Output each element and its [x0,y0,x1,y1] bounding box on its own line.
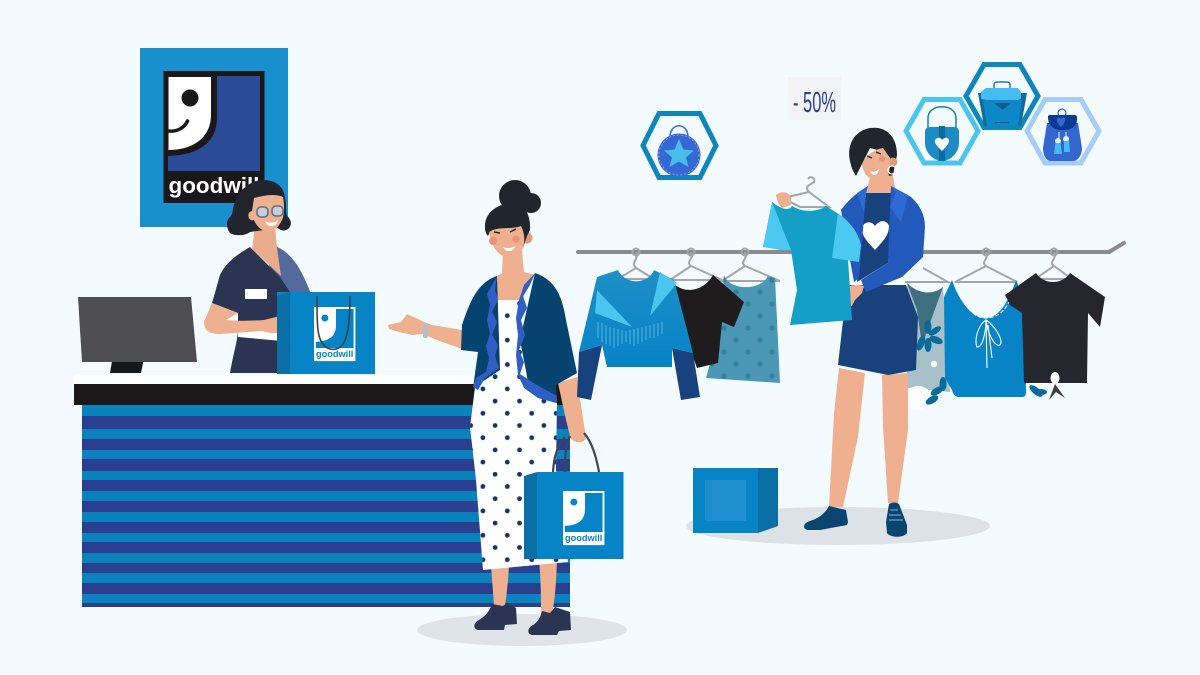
shopper ear [522,232,532,244]
gray floral top [904,283,950,410]
monitor stand [110,343,147,373]
sweater fringe [598,322,662,348]
lock bag body [925,127,959,161]
shopper right arm [558,377,586,442]
monitor screen [78,297,197,362]
name badge [245,289,267,299]
counter top [74,375,580,384]
shopper eyes [494,229,516,233]
shopper ruffle trim [473,273,557,403]
shopper [388,180,586,635]
woman legs [829,368,908,507]
sign logo [164,71,264,203]
woman ear [888,158,898,166]
hex: handbag [966,64,1038,128]
handbag flap [981,88,1021,100]
shopper bracelet [423,323,428,338]
cashier arm [204,303,295,334]
tee knot [1050,372,1060,384]
lock heart [935,138,949,151]
held hand [776,192,791,208]
flower prints [915,320,946,407]
star bag handle [670,126,688,137]
star bag body [658,134,700,176]
counter bag [277,292,375,374]
tie-neck stitching [960,293,1012,318]
sweater body [579,270,693,367]
shopper legs [491,560,557,614]
hangers [618,248,1072,282]
counter stripes [82,405,570,607]
counter [74,375,580,607]
woman face [862,148,890,182]
lock bag handle [928,107,956,128]
woman smile [870,169,879,175]
backpack tassels [1059,132,1066,140]
woman eyes [867,152,881,158]
bag body [537,472,624,559]
backpack heart [1057,118,1065,127]
shoe laces [889,510,903,520]
goodwill wall sign [140,48,288,227]
discount tag: - 50% [793,87,836,119]
woman earring [888,166,896,174]
shopper hair [485,203,530,248]
box [693,468,778,533]
cashier hair [227,180,291,235]
woman shoes [804,506,848,530]
cashier face [248,195,284,232]
blue tie-neck top [944,280,1047,399]
salesperson shadow [686,507,990,545]
fringe sweater [577,270,700,400]
star [664,139,694,167]
hex: star bag [643,114,716,178]
shirt sleeves [763,202,861,262]
backpack loop [1058,109,1066,117]
cashier glasses [257,206,283,217]
shopper bun [499,180,531,212]
woman hair [849,128,897,176]
shopper smile [503,246,515,251]
heart print [862,221,889,250]
woman with shirt [804,128,925,537]
cashier neck [252,226,281,276]
shopper shoes [474,603,517,630]
denim jacket [841,186,925,292]
held shirt [763,177,861,325]
shopper shadow [417,614,627,646]
shopping bag [524,433,624,559]
bow [976,320,1001,368]
shirt body [763,202,852,325]
woman neck [866,170,896,193]
handbag handle [994,82,1010,88]
woman skirt [838,285,918,375]
held hanger [783,177,829,207]
hex: backpack [1027,100,1099,163]
teal dotted top [706,275,780,383]
handbag back [978,93,1027,126]
cashier [204,180,311,373]
shopper face [489,226,524,258]
woman cheek [879,156,885,162]
black tee [672,275,744,368]
shopper cardigan [461,273,577,403]
bag handles [553,433,600,478]
bag logo: goodwill [565,533,602,543]
hex: lock bag [906,100,978,163]
shopper neck and chest [491,250,535,300]
woman hand [840,285,864,307]
cashier cardigan [268,246,311,300]
shopper dress [470,300,568,570]
dark tee [1005,273,1105,400]
shopper cheeks [489,237,497,245]
sweater sleeves [577,345,700,400]
sign logo: goodwill [168,173,260,198]
sweater light panels [595,272,677,327]
shopper left arm [388,314,462,349]
white hem gap [904,386,932,410]
cashier smile [265,220,278,226]
cashier belt [238,327,282,341]
jacket collar [857,186,908,222]
handbag front [983,100,1022,126]
discount tag [788,77,841,120]
counter bag handle [317,296,350,349]
monitor [78,297,197,373]
woman shirt [857,193,896,282]
backpack flap [1048,115,1077,130]
counter bag logo: goodwill [316,349,353,359]
clothes rack [578,243,1124,252]
blue leaves [1028,383,1047,399]
cashier uniform [212,247,290,373]
backpack body [1043,123,1082,161]
